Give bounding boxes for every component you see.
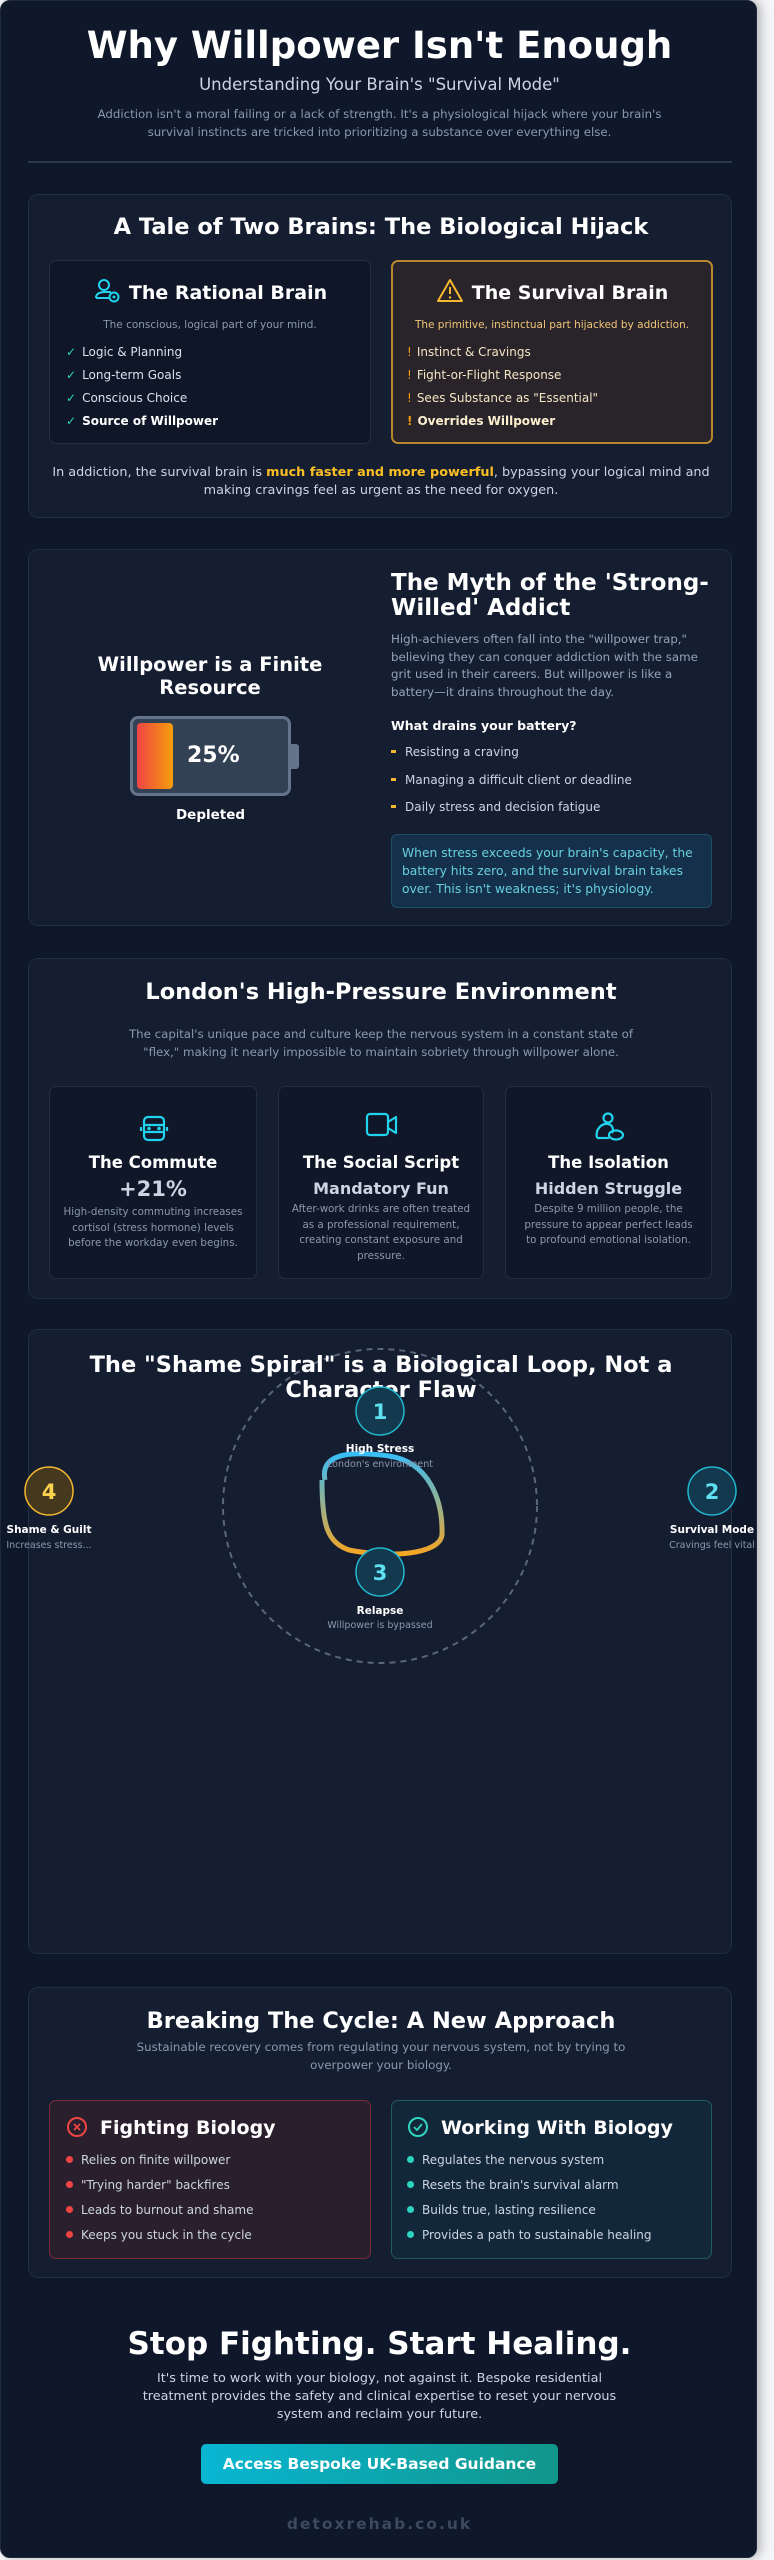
heading: two brains: A Tale of Two Brains: The Biological Hijack: [114, 214, 648, 240]
node 3: [327, 1548, 433, 1631]
list: fighting: Relies on finite willpower: [81, 2153, 230, 2167]
list: rational: ✓ Conscious Choice: [66, 391, 187, 405]
panel: shame spiral: [28, 1329, 732, 1954]
node 3: 3: [373, 1561, 387, 1585]
list: rational: [66, 345, 218, 428]
heading: shame spiral: The "Shame Spiral" is a Biological Loop, Not a: [90, 1352, 672, 1378]
list: working: Resets the brain's survival alarm: [422, 2178, 619, 2192]
list: drains: Managing a difficult client or deadline: [405, 772, 632, 786]
list: fighting: "Trying harder" backfires: [81, 2178, 230, 2192]
node 2: Cravings feel vital: [669, 1540, 755, 1551]
list: survival: [407, 345, 598, 428]
heading: myth: The Myth of the 'Strong-Willed' Addict: [391, 570, 709, 621]
desc: Despite 9 million people, the pressure to appear perfect leads to profound emotional isolation.: [524, 1203, 693, 1246]
card heading: survival: The Survival Brain: [472, 282, 668, 304]
summary text: In addiction, the survival brain is much faster and more powerful, bypassing your logical mind and making cravings feel as urgent as the need for oxygen.: [52, 465, 710, 498]
list: survival: ! Fight-or-Flight Response: [407, 368, 561, 382]
node 4: [6, 1467, 92, 1551]
label: depleted: Depleted: [176, 807, 245, 823]
panel: myth: [28, 549, 732, 926]
list: fighting: Keeps you stuck in the cycle: [81, 2228, 252, 2242]
card heading: rational: The Rational Brain: [129, 282, 327, 304]
subheading: drains: What drains your battery?: [391, 718, 576, 733]
node 4: Shame & Guilt: [7, 1524, 91, 1536]
card: rational brain: [49, 260, 371, 444]
stat: +21%: [119, 1177, 187, 1201]
title: Why Willpower Isn't Enough: [87, 24, 672, 67]
icon: battery: [130, 716, 299, 796]
intro text: Addiction isn't a moral failing or a lack of strength. It's a physiological hijack where your brain's: [98, 107, 661, 121]
node 1: London's environment: [327, 1459, 433, 1470]
list: rational: ✓ Logic & Planning: [66, 345, 182, 359]
heading: working: Working With Biology: [441, 2117, 673, 2139]
cta button: Access Bespoke UK-Based Guidance: [223, 2455, 536, 2473]
intro text: [98, 107, 661, 139]
list: survival: ! Sees Substance as "Essential": [407, 391, 598, 405]
panel: breaking the cycle: [28, 1987, 732, 2278]
list: working: Builds true, lasting resilience: [422, 2203, 596, 2217]
card: commute: [49, 1086, 257, 1279]
list: rational: ✓ Long-term Goals: [66, 368, 181, 382]
node 3: Relapse: [357, 1605, 403, 1617]
node 1: 1: [373, 1400, 387, 1424]
heading: breaking: Breaking The Cycle: A New Approach: [147, 2008, 615, 2034]
footer url: detoxrehab.co.uk: [287, 2515, 472, 2533]
node 2: [669, 1467, 755, 1551]
callout: physiology: When stress exceeds your brain's capacity, the battery hits zero, and the survival brain takes over. This isn't weakness; it's physiology.: [402, 846, 693, 896]
cta button: [201, 2444, 558, 2484]
arrow: loop: [322, 1454, 442, 1559]
title: commute: The Commute: [89, 1153, 217, 1172]
card subtitle: The conscious, logical part of your mind.: [103, 319, 317, 331]
list: fighting: Leads to burnout and shame: [81, 2203, 253, 2217]
node 1: High Stress: [346, 1443, 414, 1455]
text: myth: High-achievers often fall into the "willpower trap," believing they can conquer addiction with the same grit used in their careers. But willpower is like a battery—it drains throughout the day.: [391, 632, 698, 699]
node 4: Increases stress...: [6, 1540, 92, 1551]
title: The Isolation: [548, 1153, 669, 1172]
card: fighting biology: [49, 2100, 371, 2259]
heading: fighting: Fighting Biology: [100, 2117, 276, 2139]
heading: finite resource: Willpower is a Finite Resource: [98, 653, 322, 699]
desc: After-work drinks are often treated as a professional requirement, creating constant exposure and pressure.: [292, 1203, 470, 1262]
icon: train: [140, 1116, 168, 1142]
text: breaking: Sustainable recovery comes from regulating your nervous system, not by trying to overpower your biology.: [137, 2040, 625, 2072]
card: survival brain: [391, 260, 713, 444]
node 3: Willpower is bypassed: [327, 1620, 433, 1631]
icon: video: [366, 1112, 398, 1136]
icon: battery: 25%: [187, 743, 240, 768]
list: working: Provides a path to sustainable healing: [422, 2228, 652, 2242]
node 4: 4: [42, 1480, 56, 1504]
title: The Social Script: [303, 1153, 459, 1172]
text: london: The capital's unique pace and culture keep the nervous system in a constant state of "flex," making it nearly impossible to maintain sobriety through willpower alone.: [129, 1027, 633, 1059]
list: working: [407, 2153, 652, 2242]
icon: people: [596, 1112, 624, 1141]
desc: High-density commuting increases cortisol (stress hormone) levels before the workday even begins.: [64, 1206, 242, 1249]
cta heading: Stop Fighting. Start Healing.: [128, 2326, 631, 2362]
heading: shame spiral: [90, 1352, 672, 1403]
heading: shame spiral: Character Flaw: [285, 1377, 477, 1403]
node 2: Survival Mode: [670, 1524, 754, 1536]
diagram: shame loop: [6, 1348, 755, 1664]
node 2: 2: [705, 1480, 719, 1504]
node 1: [327, 1387, 433, 1470]
cta text: It's time to work with your biology, not against it. Bespoke residential treatment provides the safety and clinical expertise to reset your nervous system and reclaim your future.: [143, 2371, 616, 2422]
callout: physiology: [391, 834, 712, 908]
card: isolation: [505, 1086, 712, 1279]
stat: Mandatory Fun: [313, 1179, 449, 1198]
panel: two brains: [28, 194, 732, 518]
heading: london: London's High-Pressure Environment: [145, 979, 617, 1005]
card: working with biology: [391, 2100, 712, 2259]
card: social script: [278, 1086, 484, 1279]
list: fighting: [66, 2153, 253, 2242]
list: survival: ! Instinct & Cravings: [407, 345, 531, 359]
subtitle: Understanding Your Brain's "Survival Mode": [199, 75, 560, 94]
list: rational: ✓ Source of Willpower: [66, 414, 218, 428]
stat: Hidden Struggle: [535, 1179, 682, 1198]
list: survival: ! Overrides Willpower: [407, 414, 555, 428]
list: working: Regulates the nervous system: [422, 2153, 604, 2167]
card subtitle: The primitive, instinctual part hijacked by addiction.: [415, 319, 689, 331]
intro text: survival instincts are tricked into prioritizing a substance over everything else.: [148, 125, 611, 139]
list: drains: Resisting a craving: [405, 745, 519, 759]
list: drains: Daily stress and decision fatigue: [405, 800, 600, 814]
panel: london: [28, 958, 732, 1299]
list: drains: [391, 745, 632, 814]
